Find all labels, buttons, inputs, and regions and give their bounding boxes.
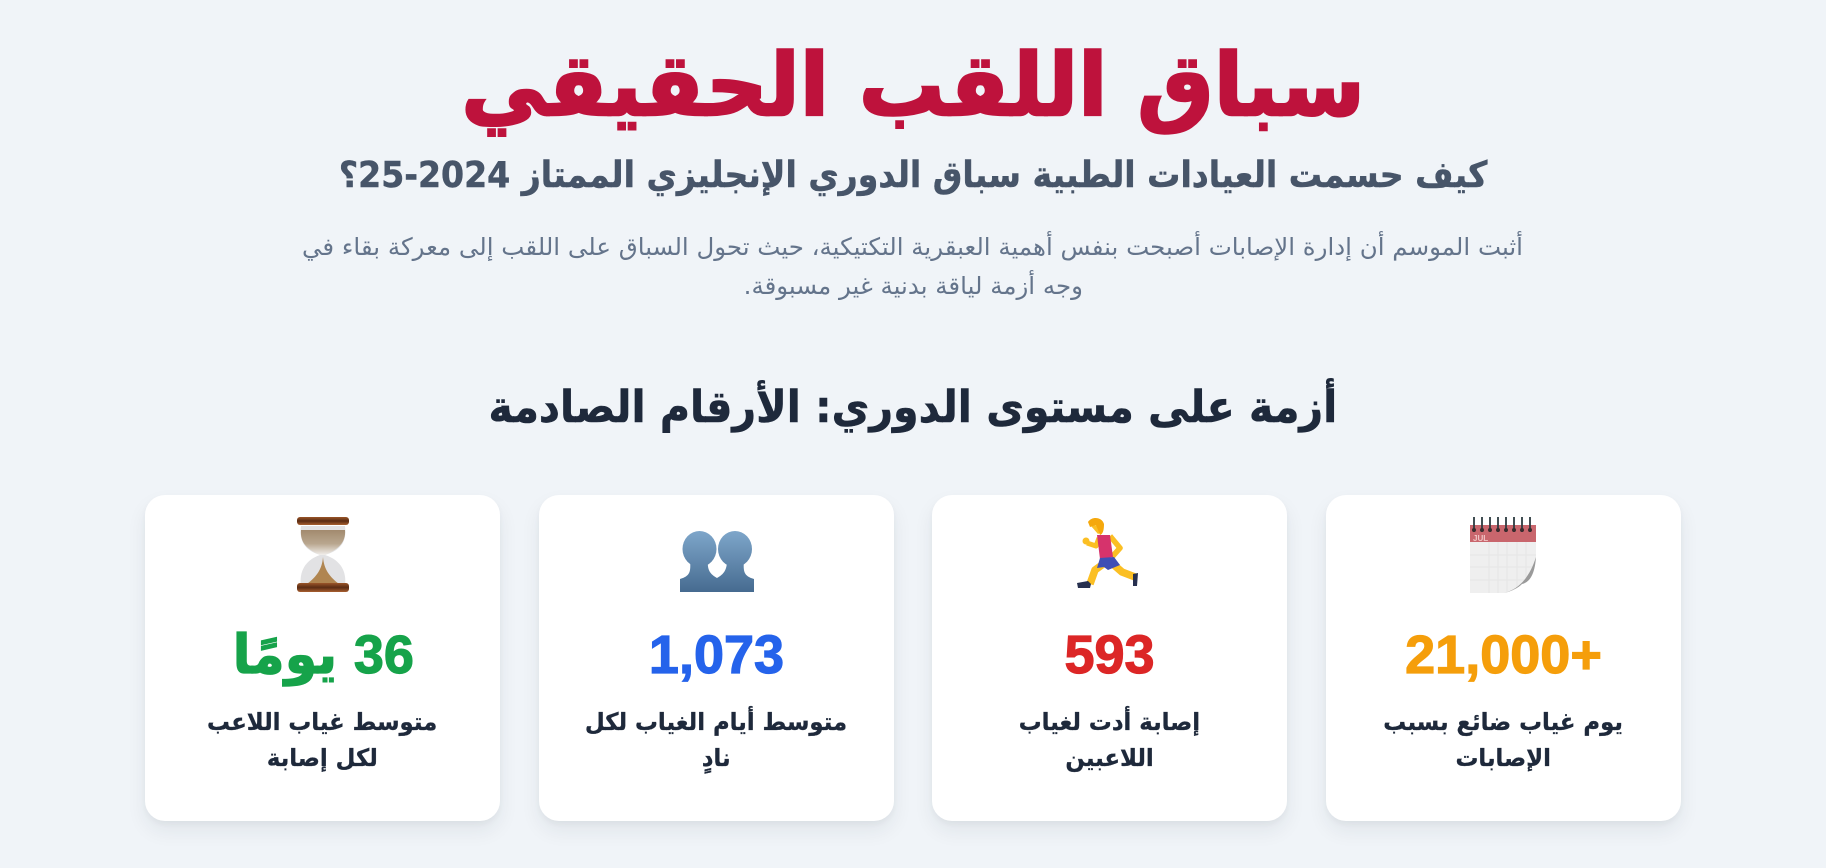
stat label: يوم غياب ضائع بسبب	[1384, 708, 1623, 736]
stat label line 2: لكل إصابة	[267, 744, 378, 772]
icon: hourglass	[297, 517, 349, 592]
panel: injuries stat card	[932, 495, 1287, 821]
subtitle: كيف حسمت العيادات الطبية سباق الدوري الإنجليزي الممتاز 2024-25؟	[339, 155, 1487, 196]
stat value	[233, 623, 414, 687]
intro text: وجه أزمة لياقة بدنية غير مسبوقة.	[743, 272, 1083, 300]
stat value: 593	[1064, 625, 1155, 685]
stat label: متوسط غياب اللاعب	[207, 708, 438, 736]
panel: club average stat card	[539, 495, 894, 821]
stat value: 36	[354, 625, 414, 685]
stat value: 1,073	[649, 625, 784, 685]
title: سباق اللقب الحقيقي	[461, 36, 1365, 136]
panel: player absence stat card	[145, 495, 500, 821]
panel: lost days stat card	[1326, 495, 1681, 821]
icon: calendar: JUL	[1473, 534, 1488, 543]
intro text: أثبت الموسم أن إدارة الإصابات أصبحت بنفس أهمية العبقرية التكتيكية، حيث تحول السباق على اللقب إلى معركة بقاء في	[303, 233, 1523, 261]
stat label: متوسط أيام الغياب لكل	[585, 708, 848, 736]
stat value: يومًا	[233, 623, 337, 686]
icon: calendar	[1470, 517, 1536, 593]
stat label: إصابة أدت لغياب	[1019, 708, 1200, 736]
stat label line 2: نادٍ	[702, 744, 731, 772]
intro text	[303, 231, 1523, 300]
stat value: +21,000	[1405, 625, 1602, 685]
icon: silhouettes	[680, 531, 754, 592]
icon: runner	[1077, 518, 1138, 588]
stat label line 2: الإصابات	[1456, 744, 1551, 772]
stat label line 2: اللاعبين	[1065, 744, 1154, 772]
section heading: أزمة على مستوى الدوري: الأرقام الصادمة	[489, 382, 1337, 433]
